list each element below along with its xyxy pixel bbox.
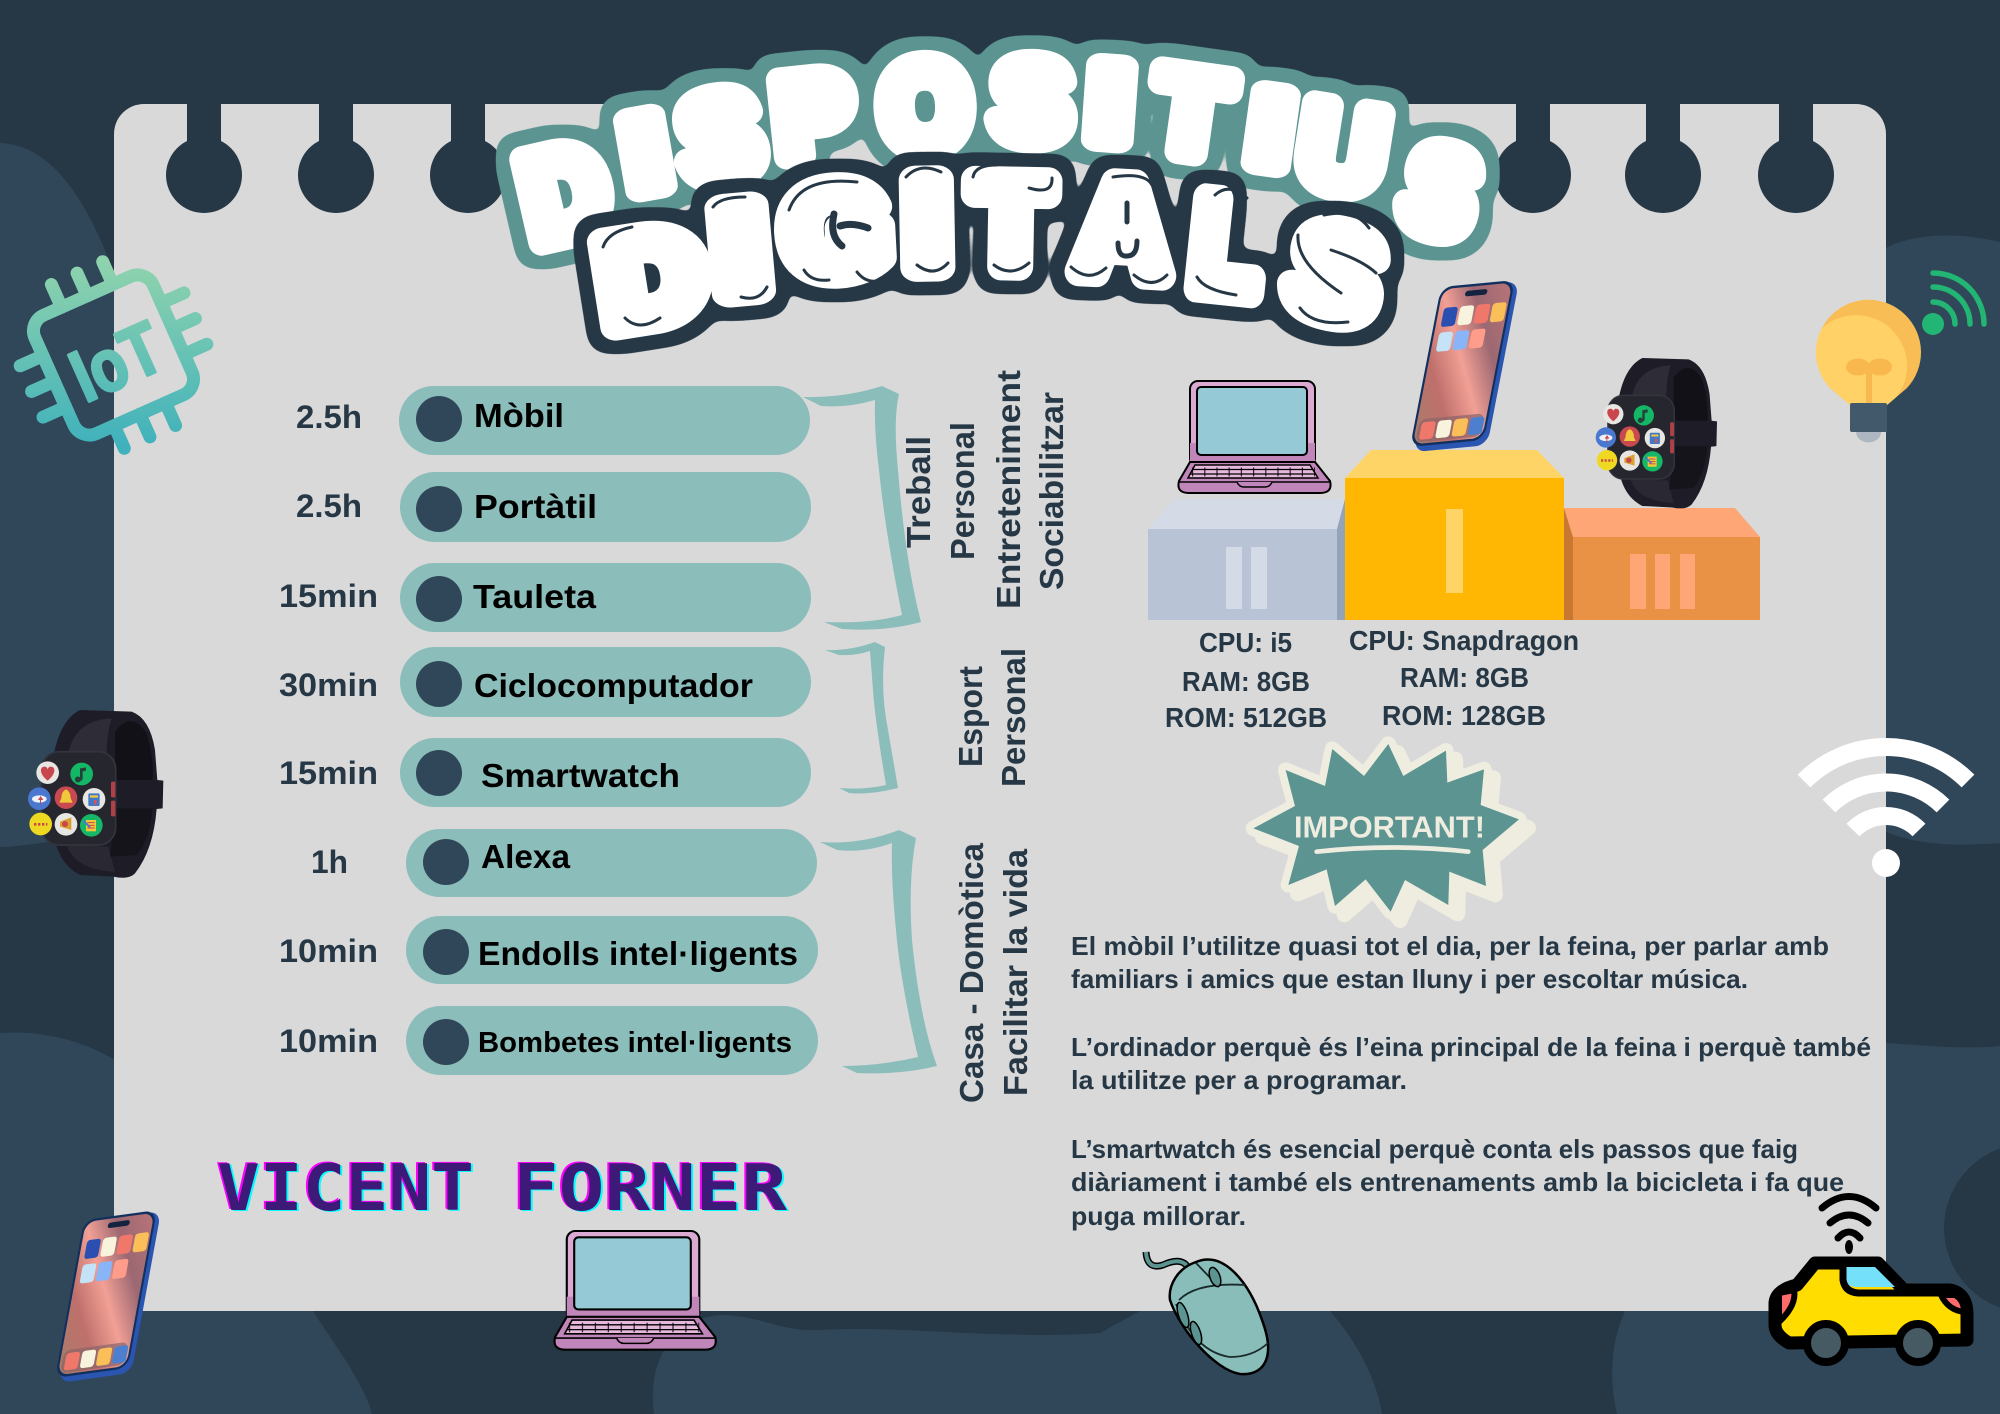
text block: explanation: familiars i amics que estan lluny i per escoltar música.: [1071, 964, 1748, 994]
icon: smartwatch on podium: [1596, 358, 1717, 508]
podium: first place: [1345, 450, 1564, 620]
label: Treball: Treball: [900, 436, 937, 548]
row: Ciclocomputador: Ciclocomputador: [474, 667, 753, 704]
row: Portàtil: [296, 472, 811, 542]
title word: Digitals: D: [589, 200, 714, 355]
title word: Dispositius: S: [991, 38, 1072, 166]
icon: phone bottom-left: [54, 1209, 161, 1384]
title word: Dispositius: I: [1244, 68, 1298, 190]
row: Mòbil: [296, 386, 810, 455]
letter G aperture: [833, 214, 868, 246]
specs: laptop: CPU: i5: [1199, 627, 1292, 658]
dark blob right: [1944, 1143, 2000, 1313]
text block: explanation: [1071, 931, 1871, 1231]
title word: Dispositius: I: [1086, 42, 1134, 166]
podium: second place: [1148, 499, 1345, 620]
podium: [1148, 450, 1760, 620]
row: Smartwatch: Smartwatch: [481, 757, 680, 794]
specs: phone: RAM: 8GB: [1400, 662, 1529, 693]
paper panel: [114, 100, 1886, 1311]
icon: mouse: [1146, 1252, 1268, 1374]
label: Facilitar la vida: Facilitar la vida: [997, 848, 1034, 1096]
icon: smart bulb: [1805, 300, 1921, 442]
row: Portàtil: 2.5h: [296, 488, 362, 524]
row: Endolls intel·ligents: [279, 916, 818, 984]
text block: explanation: El mòbil l’utilitze quasi tot el dia, per la feina, per parlar amb: [1071, 931, 1829, 961]
icon: IoT chip: IoT: [58, 306, 175, 418]
panel: device list: [279, 386, 818, 1075]
text block: explanation: la utilitze per a programar.: [1071, 1065, 1407, 1095]
title word: Dispositius: O: [879, 37, 971, 176]
title word: Digitals: A: [1074, 154, 1172, 305]
bracket: group 3: [820, 830, 937, 1073]
text block: explanation: puga millorar.: [1071, 1201, 1246, 1231]
specs: phone: CPU: Snapdragon: [1349, 625, 1579, 656]
icon: smart car: [1775, 1196, 1967, 1362]
row: Alexa: [311, 829, 817, 897]
row: Mòbil: 2.5h: [296, 399, 362, 435]
label: Casa - Domòtica: Casa - Domòtica: [953, 842, 990, 1103]
label: Esport: Esport: [952, 666, 989, 767]
row: Ciclocomputador: [279, 647, 811, 717]
title: [509, 37, 1491, 355]
title word: Digitals: S: [1276, 196, 1395, 352]
label: Personal: Personal: [944, 422, 981, 560]
row: Tauleta: Tauleta: [473, 578, 597, 615]
specs: laptop: [1165, 627, 1327, 733]
bracket: group 1: [803, 386, 921, 630]
text block: explanation: diàriament i també els entrenaments amb la bicicleta i fa que: [1071, 1167, 1844, 1197]
text block: explanation: L’ordinador perquè és l’eina principal de la feina i perquè també: [1071, 1032, 1871, 1062]
row: Tauleta: [279, 563, 811, 632]
row: Mòbil: Mòbil: [474, 397, 564, 434]
title word: Dispositius: S: [672, 66, 769, 209]
row: Smartwatch: [279, 738, 811, 807]
icon: IoT chip: [0, 237, 232, 473]
row: Portàtil: Portàtil: [474, 488, 597, 525]
title word: Dispositius: P: [769, 49, 858, 182]
badge: important: [1253, 744, 1528, 920]
label: Entreteniment: Entreteniment: [990, 370, 1027, 609]
row: Endolls intel·ligents: 10min: [279, 933, 378, 969]
row: Alexa: Alexa: [481, 838, 571, 875]
row: Ciclocomputador: 30min: [279, 667, 378, 703]
title word: Dispositius: I: [615, 92, 675, 214]
title word: Digitals: L: [1186, 168, 1268, 322]
title shine marks: [603, 165, 1376, 325]
row: Endolls intel·ligents: Endolls intel·ligents: [478, 935, 798, 972]
author name: VICENT: [217, 1152, 474, 1226]
icon: smartwatch left: [28, 710, 163, 878]
title word: Digitals: I: [905, 153, 949, 295]
title word: Digitals: [589, 153, 1395, 355]
specs: phone: ROM: 128GB: [1382, 700, 1546, 731]
badge: important: IMPORTANT!: [1294, 810, 1485, 845]
row: Bombetes intel·ligents: [279, 1006, 818, 1075]
row: Bombetes intel·ligents: 10min: [279, 1023, 378, 1059]
podium: third place: [1564, 508, 1760, 620]
label: Personal 2: Personal: [995, 648, 1032, 787]
title word: Digitals: T: [972, 154, 1050, 294]
row: Alexa: 1h: [311, 844, 348, 880]
title word: Digitals: G: [780, 157, 892, 303]
icon: laptop bottom: [555, 1231, 716, 1350]
icon: phone on podium: [1409, 280, 1519, 453]
specs: phone: [1349, 625, 1579, 731]
author name: [217, 1152, 788, 1226]
specs: laptop: RAM: 8GB: [1182, 666, 1310, 697]
author name: FORNER: [513, 1152, 788, 1226]
title word: Digitals: I: [710, 178, 771, 321]
title word: Dispositius: [509, 37, 1491, 270]
label: Sociabilitzar: Sociabilitzar: [1033, 392, 1070, 590]
icon: laptop on podium: [1178, 381, 1331, 493]
title word: Dispositius: S: [1390, 118, 1491, 264]
title word: Dispositius: T: [1147, 44, 1237, 182]
text block: explanation: L’smartwatch és esencial perquè conta els passos que faig: [1071, 1134, 1798, 1164]
bracket: group 2: [825, 642, 898, 793]
row: Tauleta: 15min: [279, 578, 378, 614]
icon: green wifi signal: [1922, 273, 1984, 335]
icon: white wifi: [1804, 747, 1968, 877]
row: Smartwatch: 15min: [279, 755, 378, 791]
specs: laptop: ROM: 512GB: [1165, 702, 1327, 733]
title word: Dispositius: D: [509, 118, 621, 270]
title word: Dispositius: U: [1291, 77, 1394, 219]
row: Bombetes intel·ligents: Bombetes intel·ligents: [478, 1027, 792, 1059]
